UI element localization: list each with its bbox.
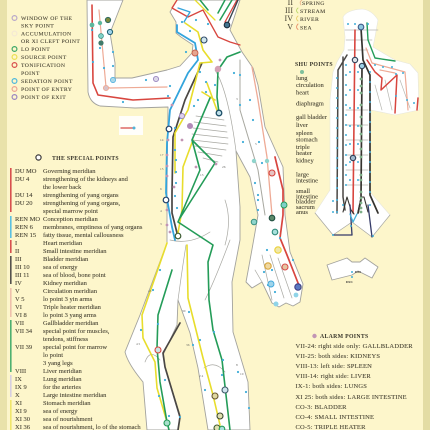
- shu points list: intestine: [296, 194, 318, 200]
- shu points list: liver: [296, 122, 309, 129]
- table rows: Bladder meridian: [43, 256, 89, 263]
- legend: point types: SOURCE POINT: [21, 55, 67, 61]
- table rows: II: [15, 248, 19, 255]
- alarm points list: XI 25: both sides: LARGE INTESTINE: [296, 394, 407, 401]
- shu points list: heart: [296, 90, 309, 96]
- table rows: VII 39: [15, 344, 32, 351]
- point number labels on front figure: 2 4: [199, 374, 204, 378]
- five transport points list: RIVER: [300, 17, 319, 23]
- table rows: Gallbladder meridian: [43, 320, 99, 327]
- table rows: sea of energy: [43, 264, 78, 271]
- table rows: IX: [15, 376, 22, 383]
- special points heading: THE SPECIAL POINTS: [52, 156, 119, 162]
- legend: point types: [12, 16, 80, 101]
- point number labels on front figure: 43: [148, 289, 152, 293]
- table rows: IV: [15, 280, 22, 287]
- point number labels on front figure: 5: [255, 142, 257, 146]
- table rows: Small intestine meridian: [43, 248, 107, 255]
- table rows: VI: [15, 304, 22, 311]
- inset: small arm detail: [119, 116, 143, 135]
- table rows: sea of energy: [43, 408, 78, 415]
- alarm points list: VIII-14: right side: LIVER: [296, 373, 371, 380]
- table rows: Conception meridian: [43, 216, 98, 223]
- table rows: DU MO: [15, 168, 37, 175]
- point number labels on front figure: 4: [160, 209, 162, 213]
- back figure outline: [315, 9, 419, 284]
- legend: point types: LO POINT: [21, 47, 50, 53]
- point number labels on front figure: 14: [160, 138, 164, 142]
- point number labels on front figure: 6: [160, 187, 162, 191]
- meridians on back figure: [333, 23, 418, 277]
- point number labels on front figure: 13: [200, 173, 204, 177]
- table rows: VII 34: [15, 328, 33, 335]
- table rows: 3 yang legs: [43, 360, 73, 367]
- five transport points list: III: [285, 6, 293, 15]
- legend: point types: SEDATION POINT: [21, 79, 73, 85]
- point number labels on front figure: 26: [222, 165, 226, 169]
- shu points list: intestine: [296, 178, 318, 184]
- shu points list: heater: [296, 150, 313, 157]
- point number labels on front figure: 4 5: [136, 342, 141, 346]
- point number labels on front figure: 3: [160, 222, 162, 226]
- legend: point types: POINT OF EXIT: [21, 95, 66, 101]
- five transport points list: SEA: [300, 26, 312, 32]
- table rows: strengthening of yang organs,: [43, 200, 121, 207]
- table rows: Governing meridian: [43, 168, 96, 175]
- shu points list: lung: [296, 75, 308, 82]
- legend: point types: WINDOW OF THE: [21, 16, 72, 22]
- shu points list: kidney: [296, 158, 314, 164]
- point number labels on front figure: [136, 97, 302, 378]
- front figure outline: [87, 0, 303, 430]
- back figure outline: DM: [355, 270, 362, 274]
- meridians on front figure: [92, 0, 300, 430]
- table rows: Circulation meridian: [43, 288, 98, 295]
- table rows: lo point 3 yin arms: [43, 296, 93, 303]
- table rows: sea of blood, bone point: [43, 272, 106, 279]
- point number labels on front figure: 8: [236, 363, 238, 367]
- special points table: [10, 155, 143, 430]
- table rows: the lower back: [43, 184, 82, 191]
- alarm points list: CO-3: BLADDER: [296, 404, 347, 411]
- point number labels on front figure: 17: [160, 153, 164, 157]
- legend: point types: TONIFICATION: [21, 63, 65, 69]
- special points heading: [36, 155, 119, 162]
- shu points list: bladder: [296, 198, 316, 206]
- table rows: special point for marrow: [43, 344, 107, 351]
- table rows: Stomach meridian: [43, 400, 91, 407]
- table rows: Kidney meridian: [43, 280, 88, 287]
- alarm points list: VII-24: right side only: GALLBLADDER: [296, 343, 413, 350]
- shu points list: circulation: [296, 82, 325, 89]
- table rows: tendons, stiffness: [43, 336, 88, 343]
- point number labels on front figure: 30: [182, 309, 186, 313]
- table rows: Liver meridian: [43, 368, 83, 375]
- colour bars: [10, 168, 12, 430]
- table rows: for the arteries: [43, 384, 81, 391]
- legend: point types: OR XI CLEFT POINT: [21, 39, 80, 45]
- table rows: membranes, emptiness of yang organs: [43, 224, 143, 231]
- table rows: Lung meridian: [43, 376, 82, 383]
- five transport points list: [285, 0, 326, 32]
- shu points list: anus: [296, 209, 308, 216]
- shu points list: SHU POINTS: [295, 62, 333, 68]
- table rows: Heart meridian: [43, 240, 83, 247]
- alarm points list: ALARM POINTS: [320, 334, 369, 340]
- alarm points list: CO-4: SMALL INTESTINE: [296, 414, 374, 421]
- point number labels on front figure: 3: [236, 97, 238, 101]
- table rows: REN 6: [15, 224, 34, 231]
- legend: point types: POINT OF ENTRY: [21, 87, 72, 93]
- table rows: VII: [15, 320, 24, 327]
- alarm points list: VII-25: both sides: KIDNEYS: [296, 353, 380, 360]
- alarm points list: [296, 334, 413, 430]
- table rows: Large intestine meridian: [43, 392, 107, 399]
- five transport points list: STREAM: [300, 9, 326, 15]
- legend: point types: ACCUMULATION: [21, 32, 72, 38]
- shu points list: [295, 62, 333, 216]
- table rows: DU 14: [15, 192, 33, 199]
- point number labels on front figure: 10: [240, 372, 244, 376]
- shu points list: small: [296, 188, 310, 195]
- shu points list: sacrum: [296, 204, 315, 211]
- table rows: [15, 168, 143, 430]
- five transport points list: SPRING: [302, 1, 325, 7]
- table rows: REN 15: [15, 232, 36, 239]
- shu points list: gall bladder: [296, 114, 328, 121]
- table rows: IX 9: [15, 384, 27, 391]
- table rows: fatty tissue, mental callousness: [43, 232, 124, 239]
- point number labels on front figure: 9: [300, 285, 302, 289]
- shu points list: large: [296, 172, 309, 178]
- shu points list: stomach: [296, 136, 318, 144]
- shu points list: triple: [296, 144, 310, 151]
- table rows: I: [15, 240, 17, 247]
- shu points list: diaphragm: [296, 100, 324, 108]
- acupoint dots on front figure: [90, 17, 301, 430]
- table rows: special point for muscles,: [43, 328, 110, 335]
- table rows: DU 4: [15, 176, 30, 183]
- table rows: REN MO: [15, 216, 40, 223]
- table rows: special marrow point: [43, 208, 98, 215]
- table rows: XI 9: [15, 408, 27, 415]
- table rows: lo point: [43, 352, 63, 359]
- legend: point types: SKY POINT: [21, 24, 54, 30]
- table rows: III 10: [15, 264, 30, 271]
- table rows: X: [15, 392, 20, 399]
- alarm points list: IX-1: both sides: LUNGS: [296, 383, 367, 390]
- table rows: V: [15, 288, 20, 295]
- table rows: Triple heater meridian: [43, 304, 102, 311]
- legend: point types: POINT: [21, 71, 40, 77]
- table rows: XI 30: [15, 416, 30, 423]
- table rows: XI: [15, 400, 22, 407]
- point number labels on front figure: 15: [160, 167, 164, 171]
- alarm points list: VIII-13: left side: SPLEEN: [296, 363, 372, 370]
- shu points list: spleen: [296, 130, 313, 137]
- table rows: V 5: [15, 296, 24, 303]
- table rows: III 11: [15, 272, 29, 279]
- table rows: sea of nourishment: [43, 416, 93, 423]
- table rows: VIII: [15, 368, 26, 375]
- table rows: lo point 3 yang arms: [43, 312, 97, 319]
- point number labels on front figure: 36: [186, 343, 190, 347]
- table rows: III: [15, 256, 22, 263]
- five transport points list: V: [287, 22, 293, 32]
- table rows: strengthening of the kidneys and: [43, 176, 129, 183]
- back figure outline: DU1: [346, 280, 353, 284]
- five transport points list: IV: [285, 14, 293, 23]
- table rows: strengthening of yang organs: [43, 192, 119, 199]
- table rows: VI 8: [15, 312, 27, 319]
- table rows: DU 20: [15, 200, 33, 207]
